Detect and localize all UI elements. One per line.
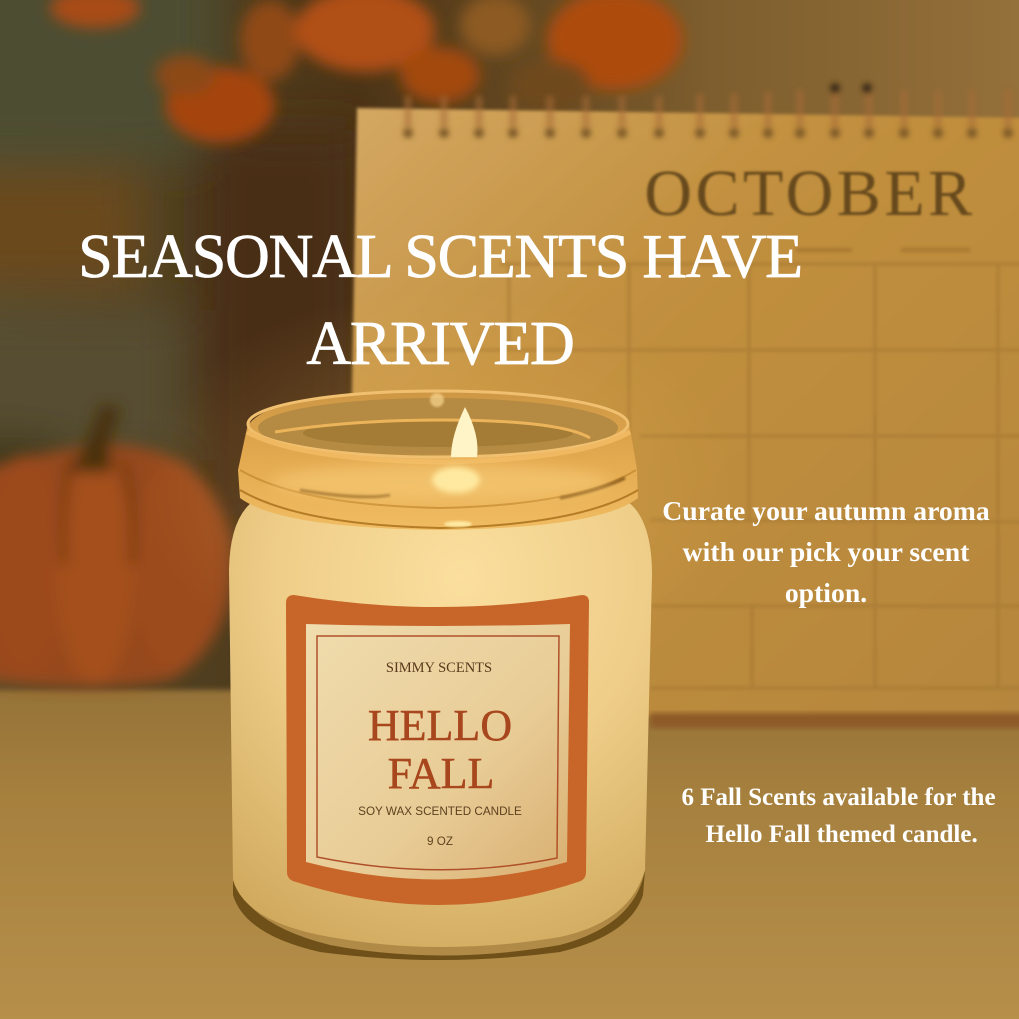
- pumpkin: [0, 405, 233, 688]
- text: six fall scents: [681, 784, 996, 848]
- table: [0, 690, 1019, 1019]
- text: six fall scents: 6 Fall Scents available for the: [681, 784, 996, 811]
- candle glow: [140, 290, 740, 690]
- flame: [432, 467, 480, 493]
- candle label: SOY WAX SCENTED CANDLE: [358, 805, 522, 818]
- jar body: [229, 390, 652, 960]
- candle label: FALL: [388, 749, 494, 798]
- flowers: [50, 0, 683, 143]
- jar neck glass: [238, 390, 638, 530]
- text: curate your aroma: Curate your autumn aroma: [662, 495, 990, 526]
- candle label: HELLO: [368, 701, 512, 750]
- text: curate your aroma: option.: [785, 577, 867, 608]
- title: SEASONAL SCENTS HAVE: [78, 223, 802, 291]
- candle label: SIMMY SCENTS: [386, 660, 492, 676]
- text: curate your aroma: with our pick your scent: [683, 536, 969, 567]
- title: [78, 223, 802, 378]
- text: curate your aroma: [662, 495, 990, 608]
- candle label: [286, 595, 589, 905]
- calendar: [350, 83, 1019, 728]
- text: six fall scents: Hello Fall themed candle.: [706, 821, 978, 848]
- calendar month label: OCTOBER: [644, 157, 976, 230]
- title: ARRIVED: [306, 310, 574, 378]
- candle label: 9 OZ: [427, 835, 453, 848]
